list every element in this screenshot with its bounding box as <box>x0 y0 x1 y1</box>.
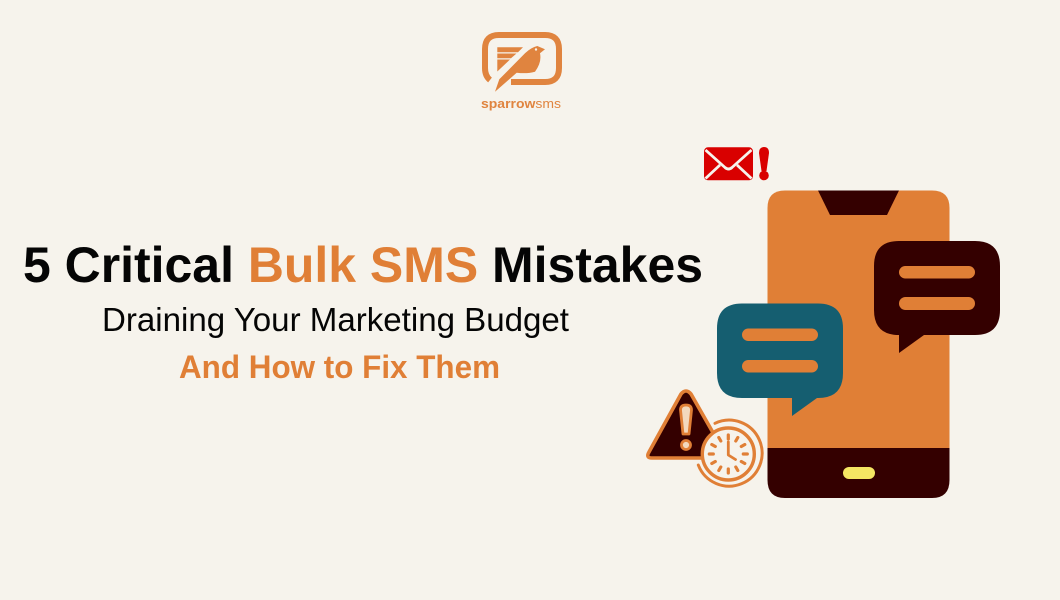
phone bottom bar <box>768 448 950 498</box>
phone illustration <box>768 190 950 498</box>
title: 5 Critical Bulk SMS Mistakes <box>23 237 703 293</box>
phone body <box>768 190 950 448</box>
icon: clock <box>698 420 762 486</box>
home button <box>843 467 875 479</box>
icon: warning triangle <box>648 391 725 458</box>
phone notch <box>818 190 899 215</box>
teal chat bubble <box>717 304 843 416</box>
subtitle: Draining Your Marketing Budget <box>102 301 569 338</box>
logo: sparrowsms <box>481 35 562 111</box>
logo wordmark: sparrow sms <box>481 96 562 111</box>
icon: red envelope alert <box>704 147 769 180</box>
logo icon: speech bubble with bird <box>485 35 559 92</box>
subheading: And How to Fix Them <box>179 349 500 385</box>
envelope <box>704 147 753 180</box>
dark chat bubble <box>874 241 1000 353</box>
exclamation mark <box>759 147 769 180</box>
